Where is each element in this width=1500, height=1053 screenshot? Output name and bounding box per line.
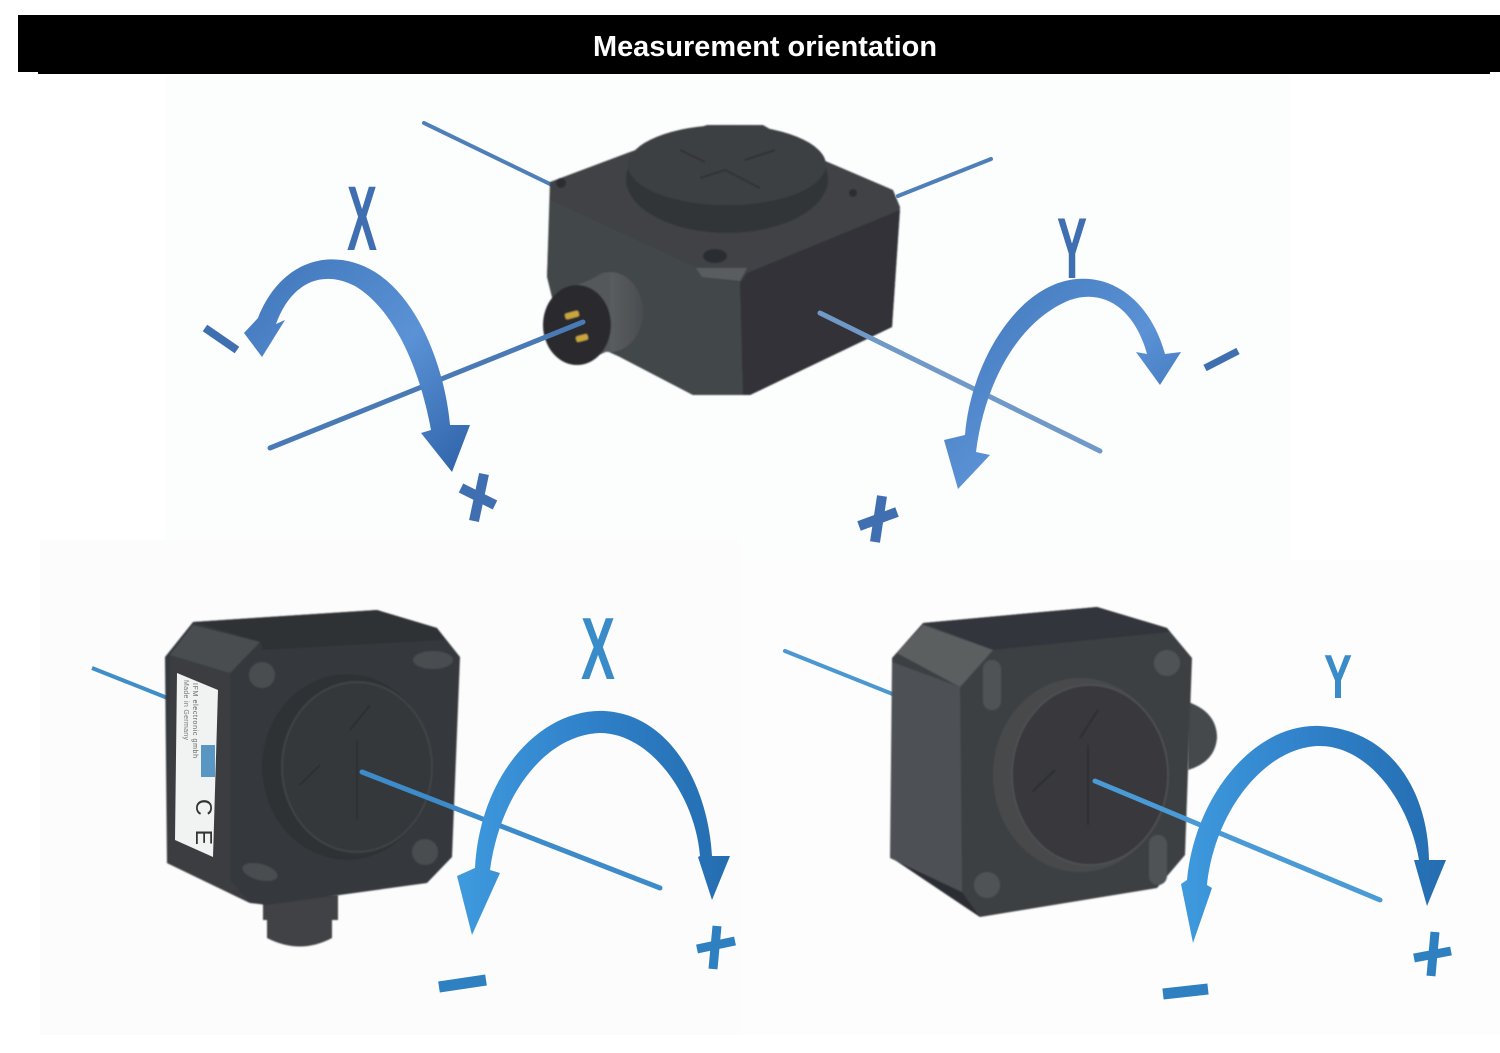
sensor body — [165, 610, 460, 905]
label: plus — [461, 474, 495, 521]
label: minus — [1163, 989, 1208, 994]
diagram: bottom right sensor with Y rotation — [785, 607, 1451, 994]
front axis lines — [270, 313, 1100, 451]
product label: CE — [191, 799, 217, 845]
label: Y: Y — [1324, 643, 1352, 712]
arrow: X rotation — [457, 711, 730, 935]
product label — [175, 673, 218, 857]
diagram: bottom left sensor with X rotation — [92, 599, 735, 987]
arrow: Y rotation — [944, 279, 1181, 489]
panel: bottom left background — [40, 540, 740, 1035]
label: plus — [697, 926, 735, 969]
panel: bottom right background — [740, 560, 1500, 1035]
title: Measurement orientation — [593, 31, 937, 63]
sensor body — [543, 125, 900, 395]
connector — [577, 272, 643, 352]
label: minus — [1205, 351, 1238, 368]
label: X: X — [581, 599, 615, 698]
product label: IFM electronic gmbh — [191, 683, 198, 758]
connector — [1188, 702, 1217, 770]
label: minus — [439, 980, 486, 987]
product label: Made in Germany — [182, 680, 189, 740]
connector — [263, 895, 338, 946]
label: plus — [1414, 932, 1451, 976]
arrow: Y rotation — [1181, 726, 1446, 943]
axis lines behind sensor — [424, 123, 991, 196]
label: Y: Y — [1057, 201, 1087, 297]
label: minus — [205, 328, 237, 350]
title bar — [18, 15, 1500, 74]
sensor body — [890, 607, 1192, 917]
label: plus — [859, 496, 897, 542]
arrow: X rotation — [244, 259, 470, 472]
panel: top view background — [165, 75, 1290, 560]
diagram: top sensor with X and Y axes — [205, 123, 1238, 542]
diagram: top sensor with X and Y axes: X — [347, 168, 377, 270]
